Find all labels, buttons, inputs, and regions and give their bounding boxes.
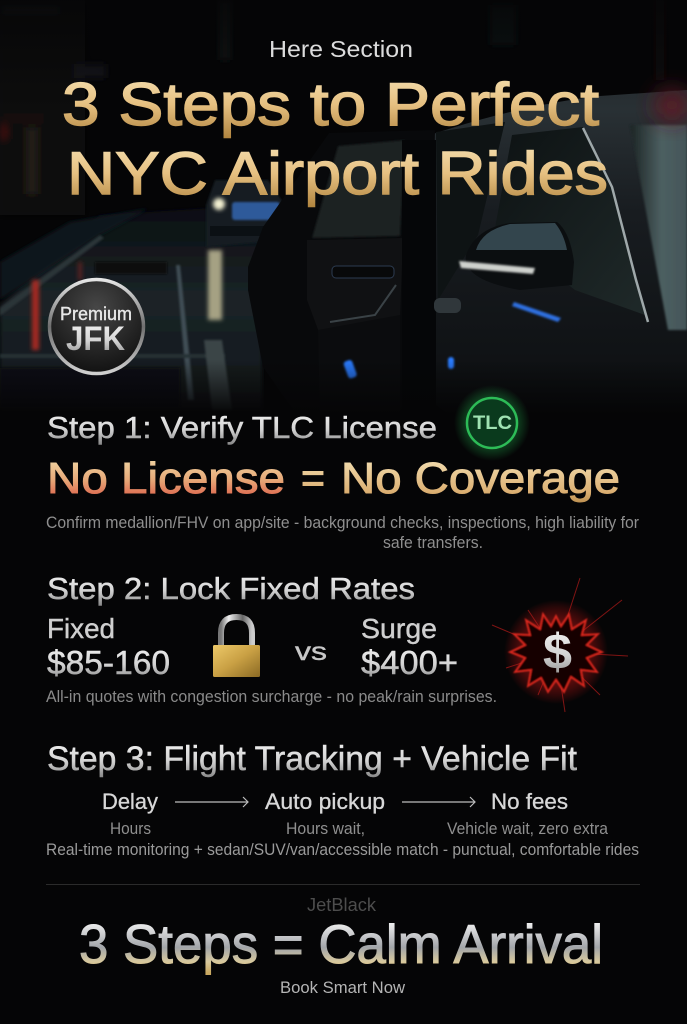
wet road [0, 205, 262, 410]
door window glass [312, 140, 405, 238]
icon: TLC green seal: TLC [473, 413, 512, 434]
car body [430, 90, 687, 440]
step 1 heading: Step 1: Verify TLC License [47, 410, 437, 445]
panel: step 3 [46, 740, 639, 859]
surge price: $400+ [361, 644, 458, 681]
step 2 heading: Step 2: Lock Fixed Rates [47, 571, 415, 606]
side window [495, 127, 645, 315]
flow captions: Vehicle wait, zero extra [447, 820, 609, 838]
brand: JetBlack: JetBlack [307, 895, 377, 915]
red and gold road reflections [32, 250, 222, 350]
eyebrow: Here Section: Here Section [269, 36, 413, 62]
door gap [402, 140, 436, 430]
blue accent lights [343, 302, 561, 379]
step 3 heading: Step 3: Flight Tracking + Vehicle Fit [47, 740, 578, 778]
fixed price [47, 613, 170, 681]
footer [79, 895, 603, 997]
step 3 description: Real-time monitoring + sedan/SUV/van/accessible match - punctual, comfortable rides [46, 841, 639, 859]
step 2 description: All-in quotes with congestion surcharge - no peak/rain surprises. [46, 688, 497, 706]
vs label: vs [295, 638, 327, 666]
title: 3 Steps to Perfect [62, 71, 599, 138]
badge: Premium JFK: Premium [60, 304, 132, 324]
flow captions: Hours [110, 820, 151, 838]
red bokeh top right [654, 87, 687, 123]
flow: auto pickup: Auto pickup [265, 789, 385, 814]
panel: step 2 [46, 571, 628, 712]
fixed price: $85-160 [47, 644, 170, 681]
surge price: Surge [361, 613, 437, 644]
panel: step 1 [46, 385, 644, 552]
open door [248, 130, 435, 420]
icon: gold padlock [213, 617, 260, 677]
icon: red dollar burst [492, 578, 628, 712]
step 1 description: safe transfers. [383, 534, 483, 552]
door handle [434, 298, 461, 313]
fixed price: Fixed [47, 613, 115, 644]
side mirror [466, 222, 574, 290]
icon: TLC green seal [454, 385, 530, 461]
badge: Premium JFK: JFK [66, 320, 125, 358]
step 1 callout: = [301, 454, 325, 503]
flow captions [110, 820, 609, 838]
arrow: auto pickup to no fees [402, 797, 475, 807]
title: NYC Airport Rides [67, 140, 608, 207]
photo fades [0, 0, 687, 110]
flow: no fees: No fees [491, 789, 568, 814]
arrow: delay to auto pickup [175, 797, 248, 807]
sidewalk [0, 208, 150, 300]
flow: delay: Delay [102, 789, 158, 814]
badge: Premium JFK [50, 280, 144, 374]
background photo: rainy street with open car door [0, 0, 687, 455]
surge price [361, 613, 458, 681]
windscreen [630, 125, 687, 330]
mirror light strip [459, 261, 535, 274]
street buildings [0, 0, 664, 215]
flow captions: Hours wait, [286, 820, 365, 838]
title [62, 71, 608, 207]
icon: red dollar burst: $ [543, 624, 572, 680]
closing headline: 3 Steps = Calm Arrival [79, 913, 603, 975]
distant blue car [206, 180, 285, 247]
step 1 callout: No Coverage [341, 454, 620, 503]
pillar chrome trim [583, 128, 648, 322]
step 1 callout: No License [47, 454, 285, 503]
call to action: Book Smart Now [280, 978, 406, 997]
door inner panel [307, 238, 403, 335]
step 1 description: Confirm medallion/FHV on app/site - background checks, inspections, high liability for [46, 514, 639, 532]
